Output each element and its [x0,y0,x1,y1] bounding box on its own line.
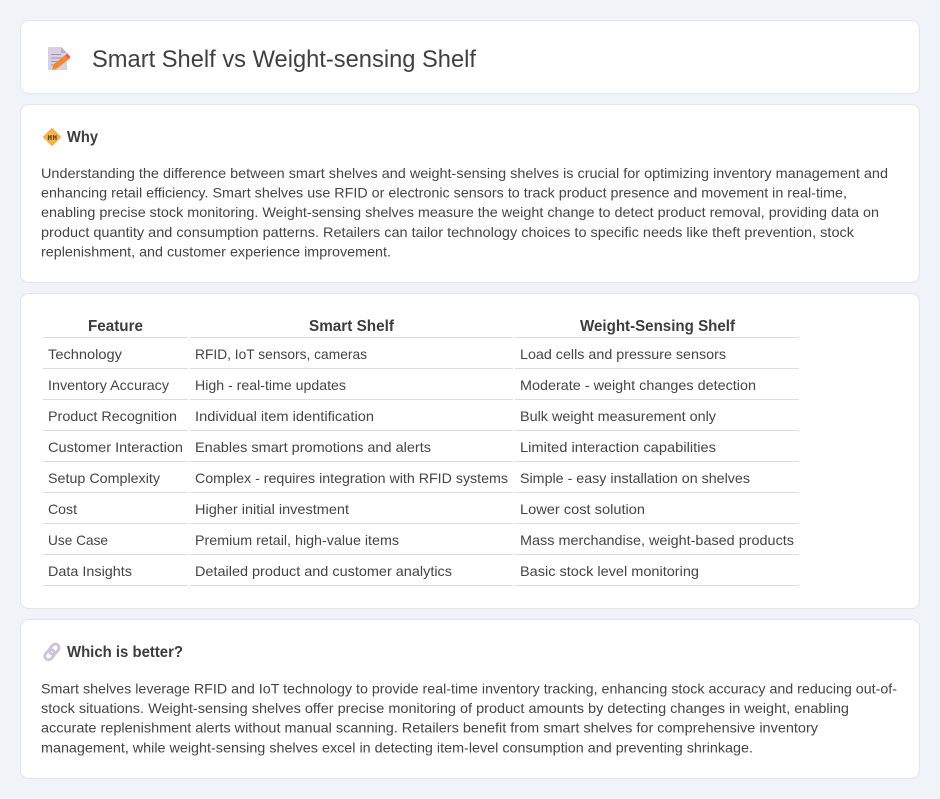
row: technology [48,346,726,362]
row: inventory accuracy [48,377,756,393]
panel: title card [20,20,920,94]
row: inventory accuracy: High - real-time updates [195,377,346,393]
text block: why: enabling precise stock monitoring. Weight-sensing shelves measure the weight change to detect product removal, providing data on [41,204,879,220]
row: product recognition: Bulk weight measurement only [520,408,716,424]
text block: which is better: management, while weight-sensing shelves excel in detecting item-level consumption and preventing shrinkage. [41,739,753,755]
row: cost [48,501,645,517]
row: cost: Lower cost solution [520,501,645,517]
row: setup complexity: Setup Complexity [48,470,160,486]
table header: Smart Shelf [309,318,395,335]
table header: Weight-Sensing Shelf [580,318,736,335]
row: use case: Use Case [48,532,108,548]
row: technology: RFID, IoT sensors, cameras [195,346,367,362]
row: data insights: Data Insights [48,563,132,579]
text block: why: replenishment, and customer experience improvement. [41,243,391,259]
row: inventory accuracy: Inventory Accuracy [48,377,169,393]
row: customer interaction: Limited interaction capabilities [520,439,716,455]
row: customer interaction: Customer Interaction [48,439,183,455]
text block: why: enhancing retail efficiency. Smart shelves use RFID or electronic sensors to track product presence and movement in real-time, [41,185,847,201]
row: technology: Load cells and pressure sensors [520,346,726,362]
heading: which is better: Which is better? [67,644,183,661]
text block: which is better: Smart shelves leverage RFID and IoT technology to provide real-time inventory tracking, enhancing stock accuracy and reducing out-of- [41,680,897,696]
row: use case: Premium retail, high-value items [195,532,399,548]
row: data insights: Basic stock level monitoring [520,563,699,579]
row: use case [48,532,794,548]
row: customer interaction [48,439,716,455]
row: inventory accuracy: Moderate - weight changes detection [520,377,756,393]
row: setup complexity: Simple - easy installation on shelves [520,470,750,486]
text block: why: Understanding the difference between smart shelves and weight-sensing shelves is crucial for optimizing inventory management and [41,165,888,181]
text block: which is better: stock situations. Weight-sensing shelves offer precise monitoring of product amounts by detecting changes in weight, enabling [41,700,849,716]
row: setup complexity: Complex - requires integration with RFID systems [195,470,508,486]
panel: comparison table [20,294,920,608]
row: setup complexity [48,470,750,486]
row: product recognition: Product Recognition [48,408,177,424]
text block: why [41,165,888,259]
row: data insights: Detailed product and customer analytics [195,563,452,579]
row: technology: Technology [48,346,122,362]
text block: why: product quantity and consumption patterns. Retailers can tailor technology choices to specific needs like theft prevention, stock [41,224,855,240]
row: product recognition: Individual item identification [195,408,374,424]
icon: memo with pencil [48,47,70,70]
row: cost: Higher initial investment [195,501,349,517]
title: Smart Shelf vs Weight-sensing Shelf [92,46,476,73]
table header [88,318,736,335]
row: customer interaction: Enables smart promotions and alerts [195,439,431,455]
icon: warning diamond [44,128,60,146]
row: cost: Cost [48,501,77,517]
row: product recognition [48,408,716,424]
row: data insights [48,563,699,579]
table header: Feature [88,318,143,335]
heading: why: Why [67,129,98,146]
icon: link [43,643,61,661]
panel: which is better [20,620,920,778]
text block: which is better [41,680,897,755]
panel: why [20,104,920,282]
text block: which is better: accurate replenishment alerts without manual scanning. Retailers benefit from smart shelves for comprehensive inventory [41,720,818,736]
row: use case: Mass merchandise, weight-based products [520,532,794,548]
